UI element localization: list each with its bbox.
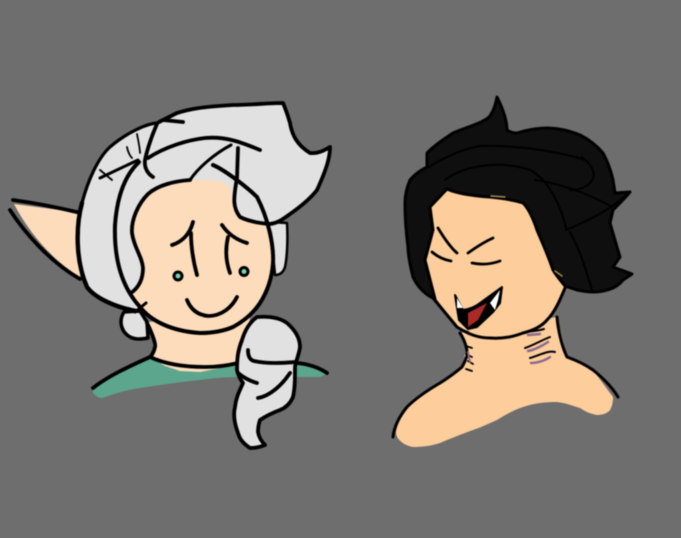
icon: green shirt [93,357,327,398]
icon: pointed ear [10,200,82,279]
icon: hair inner lines [427,146,630,290]
hair outlines [78,103,330,333]
icon: hair highlight strands [491,196,562,276]
icon: fanged open mouth [455,287,502,329]
icon: face [425,188,567,338]
icon: side lock behind face [270,222,287,275]
character: black-haired fanged man [393,97,632,447]
icon: face [132,180,273,333]
icon: right tear [240,268,248,276]
icon: black hair [405,97,632,299]
icon: front quiff [143,103,330,224]
icon: neck and collar lines [93,323,327,388]
icon: neck and shoulders [396,317,613,447]
icon: smile [187,297,237,316]
icon: back hair [78,120,220,311]
icon: jaw and neck outline [393,288,618,437]
icon: inner hair band [115,135,273,307]
icon: hair bun at nape [121,311,148,339]
icon: braid [234,317,300,448]
icon: eyebrows and closed eyes [172,222,247,275]
icon: neck [147,318,250,372]
icon: closed eyes and brows [432,228,500,264]
icon: left tear [174,272,182,280]
character: white-haired elf [10,103,330,448]
icon: neck scars [466,329,555,371]
